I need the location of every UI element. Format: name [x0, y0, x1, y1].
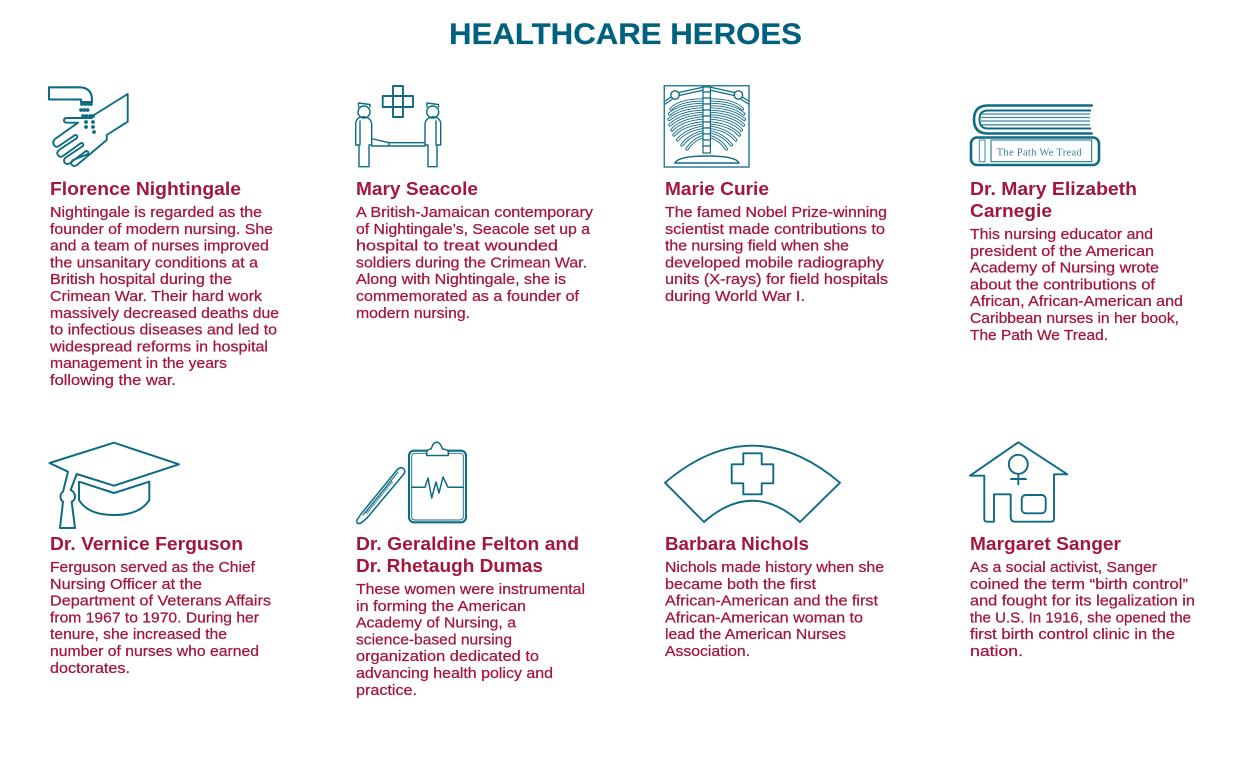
heading: Dr. Rhetaugh Dumas	[356, 556, 543, 576]
text block: organization dedicated to	[356, 649, 539, 665]
text block: hospital to treat wounded	[356, 239, 558, 255]
icon: nurse cap	[665, 446, 840, 522]
text block: number of nurses who earned	[50, 644, 259, 660]
text block: British hospital during the	[50, 272, 232, 288]
text block: advancing health policy and	[356, 666, 553, 682]
text block: The famed Nobel Prize-winning	[665, 205, 887, 221]
text block: Association.	[665, 644, 750, 660]
text block: to infectious diseases and led to	[50, 323, 277, 339]
text block: scientist made contributions to	[665, 222, 885, 238]
panel: Dr. Vernice Ferguson	[50, 443, 271, 677]
text block: practice.	[356, 683, 417, 699]
text block: management in the years	[50, 356, 227, 372]
text block	[970, 560, 1195, 660]
text block: the unsanitary conditions at a	[50, 255, 258, 271]
text block: Department of Veterans Affairs	[50, 594, 271, 610]
text block: founder of modern nursing. She	[50, 222, 273, 238]
heading: Dr. Vernice Ferguson	[50, 534, 243, 554]
text block: commemorated as a founder of	[356, 289, 579, 305]
icon: stretcher bearers and cross	[356, 86, 441, 167]
text block: in forming the American	[356, 599, 526, 615]
text block: African-American and the first	[665, 594, 878, 610]
panel: Dr. Mary Elizabeth Carnegie	[970, 106, 1183, 344]
panel: Mary Seacole	[356, 86, 594, 322]
panel: Dr. Geraldine Felton and Dr. Rhetaugh Dumas	[356, 442, 585, 699]
text block	[49, 205, 279, 389]
text block: Academy of Nursing wrote	[970, 261, 1159, 277]
text block: Caribbean nurses in her book,	[970, 311, 1179, 327]
text block: modern nursing.	[356, 306, 470, 322]
text block	[970, 227, 1183, 344]
text block: of Nightingale’s, Seacole set up a	[356, 222, 590, 238]
text block: first birth control clinic in the	[970, 627, 1175, 643]
text block	[665, 205, 888, 305]
heading: Carnegie	[970, 201, 1052, 221]
text block: These women were instrumental	[356, 582, 585, 598]
text block: tenure, she increased the	[50, 627, 227, 643]
text block	[356, 205, 594, 322]
heading: Margaret Sanger	[970, 534, 1121, 554]
text block: nation.	[970, 644, 1023, 660]
text block: Along with Nightingale, she is	[356, 272, 566, 288]
text block: soldiers during the Crimean War.	[356, 255, 587, 271]
text block: the nursing field when she	[665, 239, 849, 255]
text block: the U.S. In 1916, she opened the	[970, 610, 1191, 626]
text block: lead the American Nurses	[665, 627, 846, 643]
heading: Dr. Geraldine Felton and	[356, 534, 579, 554]
text block: African-American woman to	[665, 610, 863, 626]
text block: African, African-American and	[970, 294, 1183, 310]
heading	[356, 534, 579, 576]
text block: units (X-rays) for field hospitals	[665, 272, 888, 288]
heading: Florence Nightingale	[50, 179, 241, 199]
icon: chest x-ray	[664, 86, 749, 167]
text block: Ferguson served as the Chief	[50, 560, 255, 576]
text block: Crimean War. Their hard work	[50, 289, 263, 305]
text block: coined the term “birth control”	[970, 577, 1188, 593]
title: HEALTHCARE HEROES	[449, 18, 802, 51]
text block: Academy of Nursing, a	[356, 616, 516, 632]
text block: during World War I.	[665, 289, 805, 305]
heading: Barbara Nichols	[665, 534, 809, 554]
icon: stacked books	[971, 106, 1099, 165]
text block: from 1967 to 1970. During her	[50, 610, 259, 626]
heading: Mary Seacole	[356, 179, 478, 199]
text block: widespread reforms in hospital	[49, 339, 268, 355]
panel: Barbara Nichols	[665, 446, 884, 660]
heading: Marie Curie	[665, 179, 769, 199]
text block: doctorates.	[50, 661, 130, 677]
text block	[665, 560, 884, 660]
heading	[970, 179, 1137, 221]
text block: following the war.	[50, 373, 176, 389]
text block: Nightingale is regarded as the	[50, 205, 262, 221]
text block: president of the American	[970, 244, 1154, 260]
icon: house with female symbol	[970, 442, 1067, 522]
text block: developed mobile radiography	[665, 255, 885, 271]
text block: This nursing educator and	[970, 227, 1153, 243]
text block: became both the first	[665, 577, 816, 593]
panel: Marie Curie	[664, 86, 888, 305]
text block	[50, 560, 271, 677]
text block: science-based nursing	[356, 632, 512, 648]
text block: A British-Jamaican contemporary	[356, 205, 594, 221]
text block	[356, 582, 585, 699]
text block: Nichols made history when she	[665, 560, 884, 576]
text block: The Path We Tread.	[970, 328, 1108, 344]
icon: hand washing	[49, 87, 128, 166]
icon: thermometer and clipboard	[357, 442, 466, 524]
text block: and fought for its legalization in	[970, 594, 1195, 610]
text block: and a team of nurses improved	[50, 239, 269, 255]
icon: graduation cap	[50, 443, 179, 528]
panel: Margaret Sanger	[970, 442, 1195, 660]
text block: Nursing Officer at the	[50, 577, 202, 593]
heading: Dr. Mary Elizabeth	[970, 179, 1137, 199]
icon: stacked books: The Path We Tread	[997, 148, 1082, 158]
text block: As a social activist, Sanger	[970, 560, 1157, 576]
text block: massively decreased deaths due	[50, 306, 279, 322]
text block: about the contributions of	[970, 277, 1155, 293]
panel: Florence Nightingale	[49, 87, 279, 389]
